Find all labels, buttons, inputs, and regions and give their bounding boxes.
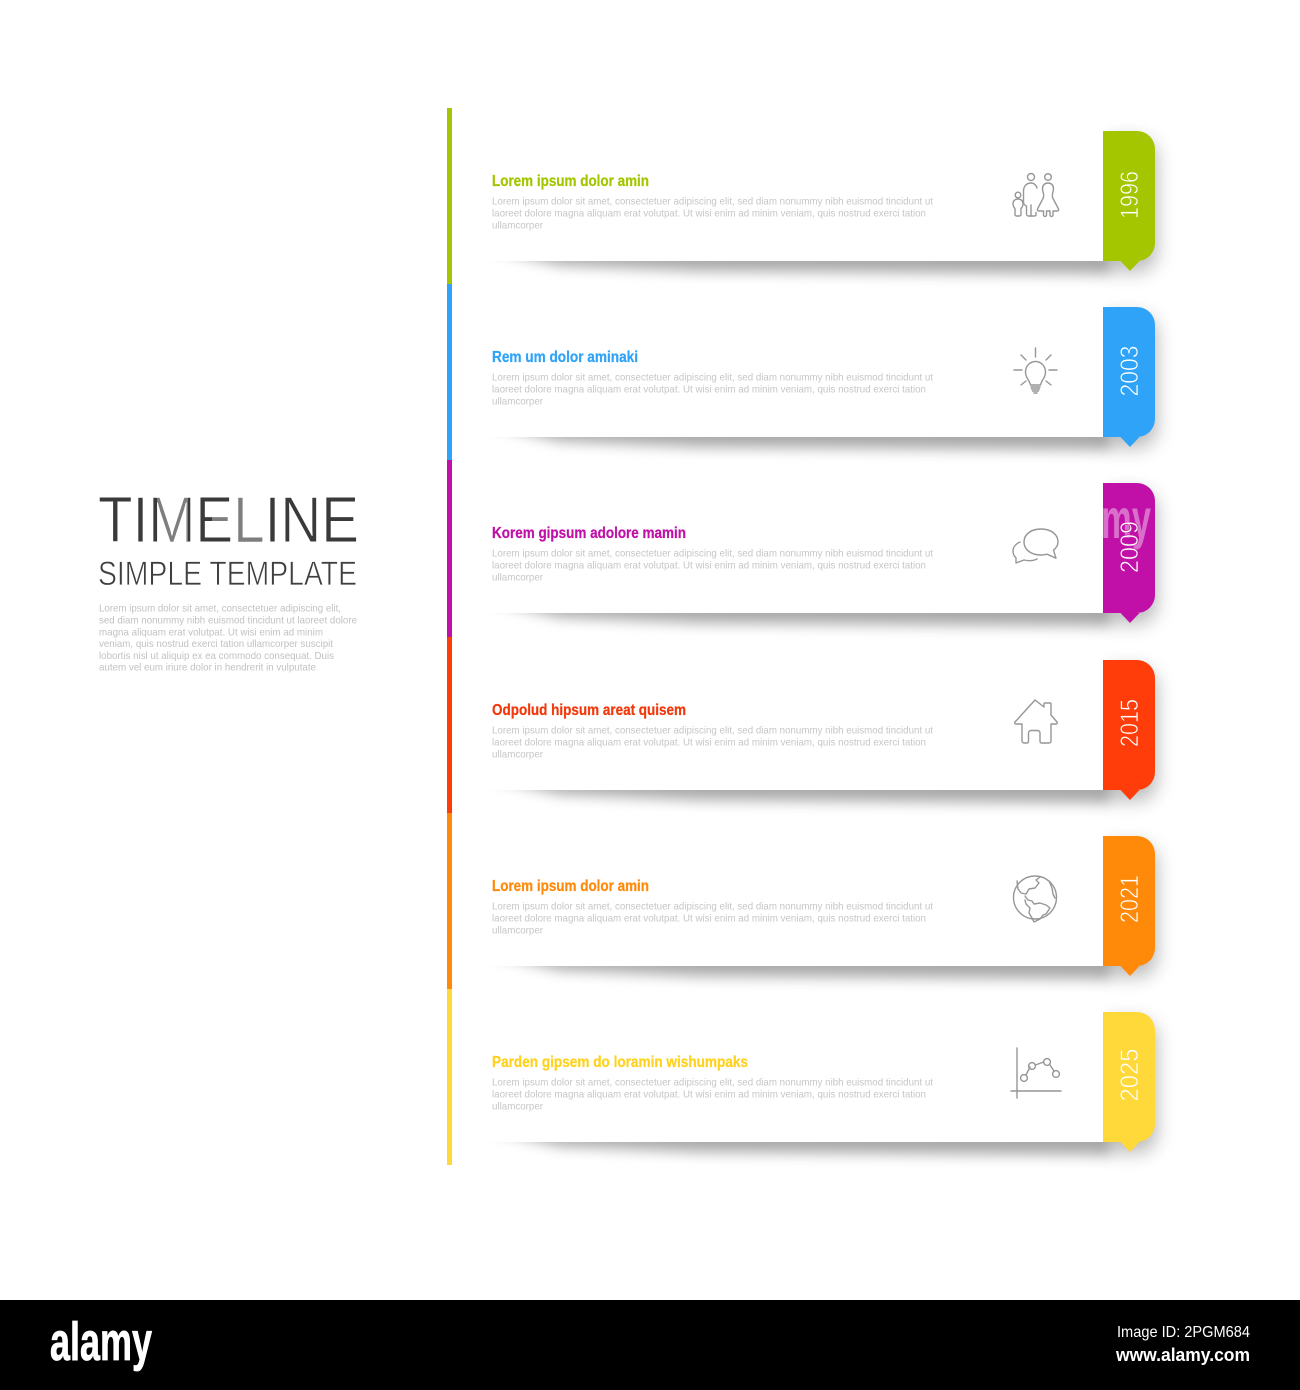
body text: ullamcorper — [492, 220, 543, 232]
intro paragraph: Lorem ipsum dolor sit amet, consectetuer adipiscing elit, — [99, 602, 341, 614]
title block — [98, 483, 359, 674]
body text: ullamcorper — [492, 748, 543, 760]
intro paragraph: magna aliquam erat volutpat. Ut wisi enim ad minim — [99, 626, 323, 638]
panel: 2015 — [460, 649, 1157, 803]
body text: ullamcorper — [492, 1100, 543, 1112]
timeline vertical bar — [447, 108, 452, 1165]
heading: Lorem ipsum dolor amin — [492, 878, 649, 895]
tab: year 1996: 1996 — [1116, 171, 1144, 219]
body text: laoreet dolore magna aliquam erat volutpat. Ut wisi enim ad minim veniam, quis nostrud exerci tation — [492, 384, 926, 396]
panel: 2021 — [460, 825, 1157, 979]
panel: 1996 — [460, 120, 1157, 274]
body text: laoreet dolore magna aliquam erat volutpat. Ut wisi enim ad minim veniam, quis nostrud exerci tation — [492, 560, 926, 572]
body text — [492, 900, 933, 936]
body text: Lorem ipsum dolor sit amet, consectetuer adipiscing elit, sed diam nonummy nibh euismod tincidunt ut — [492, 1076, 933, 1088]
tab: year 2015 — [1103, 660, 1155, 800]
heading: Rem um dolor aminaki — [492, 349, 638, 366]
tab: year 2003 — [1103, 307, 1155, 447]
icon: globe — [1014, 876, 1056, 922]
panel: 2009 — [460, 472, 1157, 626]
tab: year 2021 — [1103, 836, 1155, 976]
intro paragraph — [99, 602, 357, 674]
tab: year 2025 — [1103, 1012, 1155, 1152]
body text: ullamcorper — [492, 396, 543, 408]
website: www.alamy.com — [1115, 1345, 1250, 1365]
tab: year 2015: 2015 — [1116, 699, 1144, 747]
body text — [492, 1076, 933, 1112]
icon: house — [1015, 700, 1057, 743]
intro paragraph: veniam, quis nostrud exerci tation ullamcorper suscipit — [99, 638, 333, 650]
heading: Parden gipsem do loramin wishumpaks — [492, 1054, 748, 1071]
intro paragraph: sed diam nonummy nibh euismod tincidunt ut laoreet dolore — [99, 614, 357, 626]
logo: alamy: alamy — [50, 1312, 152, 1372]
tab: year 2009 — [1101, 483, 1155, 623]
body text: Lorem ipsum dolor sit amet, consectetuer adipiscing elit, sed diam nonummy nibh euismod tincidunt ut — [492, 548, 933, 560]
tab: year 2009: 2009 — [1116, 521, 1144, 573]
tab: year 2025: 2025 — [1116, 1048, 1144, 1102]
title: timeline: TIMELINE — [98, 483, 359, 556]
panel: 2025 — [460, 1001, 1157, 1155]
body text — [492, 724, 933, 760]
tab: year 2009: my — [1101, 487, 1151, 550]
heading: Korem gipsum adolore mamin — [492, 525, 686, 542]
body text: laoreet dolore magna aliquam erat volutpat. Ut wisi enim ad minim veniam, quis nostrud exerci tation — [492, 912, 926, 924]
tab: year 2021: 2021 — [1116, 875, 1144, 923]
icon: light bulb — [1014, 348, 1057, 393]
intro paragraph: lobortis nisl ut aliquip ex ea commodo consequat. Duis — [99, 650, 334, 662]
body text: laoreet dolore magna aliquam erat volutpat. Ut wisi enim ad minim veniam, quis nostrud exerci tation — [492, 208, 926, 220]
subtitle: SIMPLE TEMPLATE — [98, 555, 357, 593]
body text: ullamcorper — [492, 924, 543, 936]
icon: family — [1013, 174, 1059, 217]
watermark wash over title — [157, 495, 262, 541]
heading: Lorem ipsum dolor amin — [492, 173, 649, 190]
tab: year 1996 — [1103, 131, 1155, 271]
body text: ullamcorper — [492, 572, 543, 584]
panel: 2003 — [460, 296, 1157, 450]
body text: Lorem ipsum dolor sit amet, consectetuer adipiscing elit, sed diam nonummy nibh euismod tincidunt ut — [492, 900, 933, 912]
body text: Lorem ipsum dolor sit amet, consectetuer adipiscing elit, sed diam nonummy nibh euismod tincidunt ut — [492, 372, 933, 384]
icon: speech bubbles — [1013, 529, 1058, 563]
heading: Odpolud hipsum areat quisem — [492, 702, 686, 719]
body text: laoreet dolore magna aliquam erat volutpat. Ut wisi enim ad minim veniam, quis nostrud exerci tation — [492, 1088, 926, 1100]
icon: line chart — [1011, 1048, 1061, 1098]
image id: Image ID: 2PGM684 — [1117, 1324, 1250, 1341]
body text: Lorem ipsum dolor sit amet, consectetuer adipiscing elit, sed diam nonummy nibh euismod tincidunt ut — [492, 196, 933, 208]
body text — [492, 196, 933, 232]
body text — [492, 372, 933, 408]
footer bar — [0, 1300, 1300, 1390]
body text — [492, 548, 933, 584]
body text: Lorem ipsum dolor sit amet, consectetuer adipiscing elit, sed diam nonummy nibh euismod tincidunt ut — [492, 724, 933, 736]
body text: laoreet dolore magna aliquam erat volutpat. Ut wisi enim ad minim veniam, quis nostrud exerci tation — [492, 736, 926, 748]
intro paragraph: autem vel eum iriure dolor in hendrerit in vulputate — [99, 662, 316, 674]
tab: year 2003: 2003 — [1116, 346, 1144, 396]
